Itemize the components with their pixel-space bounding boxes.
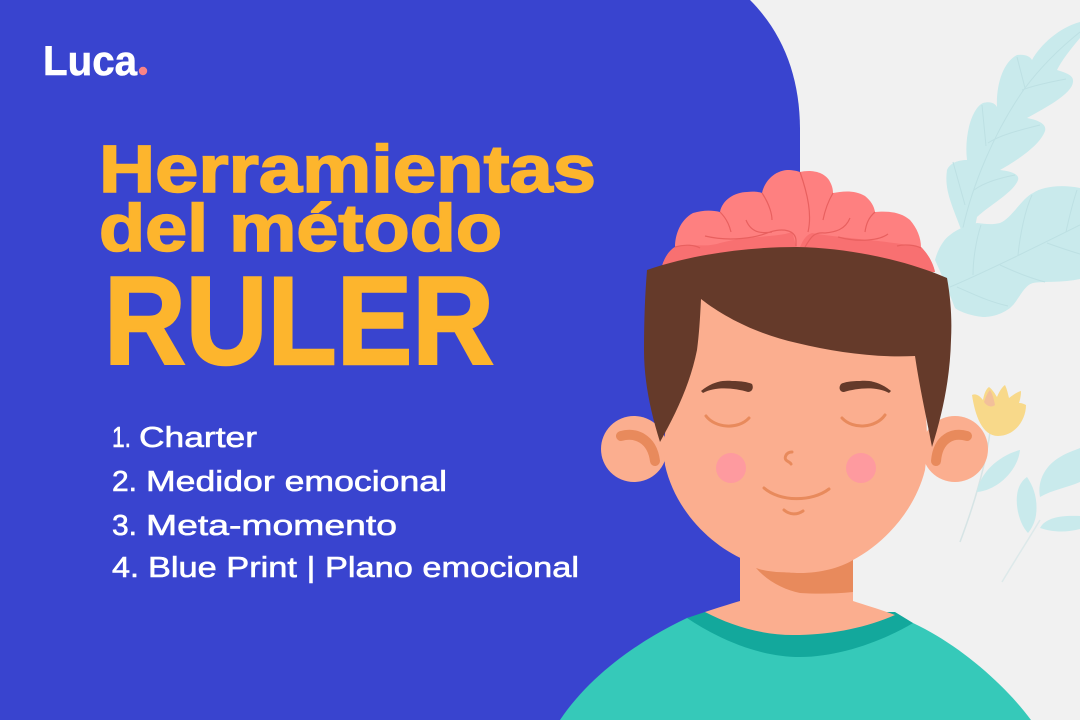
list of tools: Meta-momento (146, 510, 397, 542)
left ear (601, 416, 667, 482)
right eyebrow (840, 381, 891, 393)
title: del método (99, 191, 502, 266)
decorative leaves (935, 22, 1080, 582)
left cheek (716, 453, 746, 483)
hair (644, 247, 951, 447)
neck (705, 540, 895, 635)
panel: blue background (0, 0, 800, 720)
shirt (560, 600, 1031, 720)
title: RULER (104, 252, 494, 391)
list of tools: 4. (112, 552, 139, 584)
mouth (764, 488, 829, 514)
right cheek (846, 453, 876, 483)
face (664, 290, 927, 573)
list of tools: 1. (112, 422, 131, 454)
title: Herramientas (99, 132, 596, 207)
title (99, 132, 596, 391)
list of tools: 2. (112, 466, 137, 498)
list of tools: Blue Print | Plano emocional (148, 552, 579, 584)
list of tools: 3. (112, 510, 137, 542)
list of tools: Medidor emocional (146, 466, 447, 498)
right ear (922, 416, 988, 482)
closed eyes (706, 415, 885, 426)
brain (662, 170, 935, 275)
logo: Luca: Luca (43, 37, 138, 84)
icon: flower (972, 385, 1026, 436)
icon: upper leaf (946, 22, 1080, 232)
list of tools: Charter (139, 422, 257, 454)
neck shadow (756, 558, 853, 594)
icon: lower leaf (935, 186, 1080, 317)
list of tools (112, 422, 579, 584)
shirt collar (687, 612, 913, 657)
icon: right sprig (1002, 448, 1080, 582)
illustration: boy with visible brain (560, 170, 1031, 720)
icon: flower stem with leaf (960, 432, 1020, 542)
left eyebrow (701, 381, 753, 393)
nose (785, 452, 792, 464)
